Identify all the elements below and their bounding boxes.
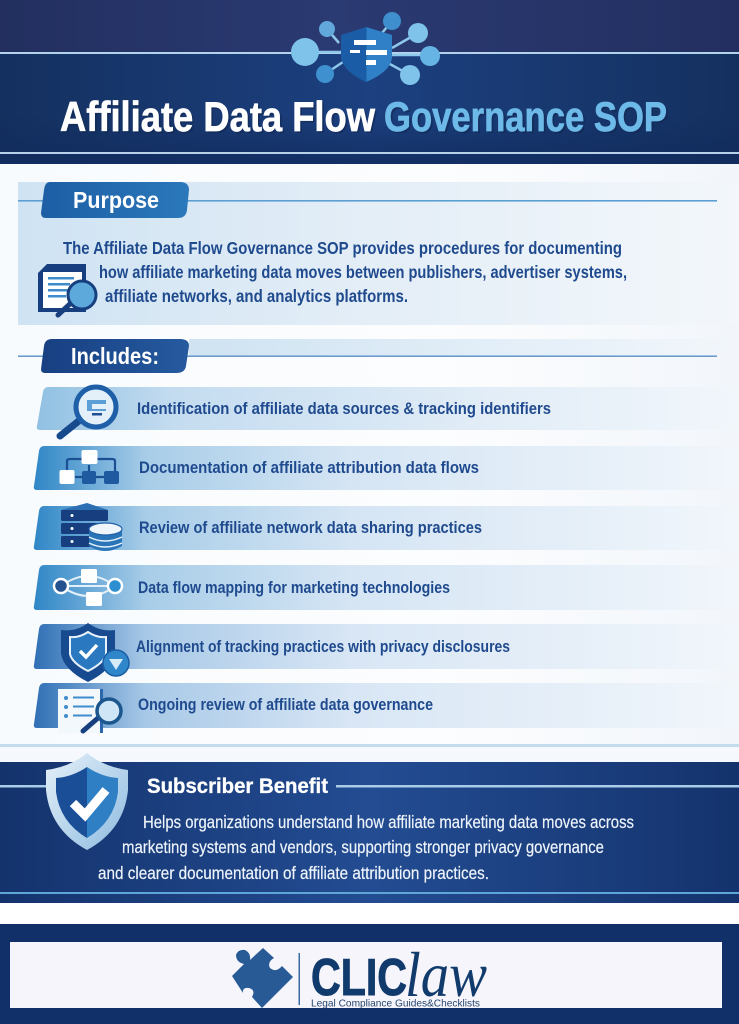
divider [0,744,739,747]
heading: includes: Includes: [71,343,159,369]
text: purpose description: how affiliate marketing data moves between publishers, advertiser systems, [99,262,627,282]
logo: wordmark [311,939,487,1010]
heading: subscriber benefit: Subscriber Benefit [147,775,328,798]
icon: checklist with magnifier [58,689,121,733]
row 4: flow mapping: Data flow mapping for marketing technologies [138,578,450,597]
heading: purpose [41,182,189,218]
row 1: data sources [37,387,739,436]
header banner [0,0,739,164]
row 3: network data sharing: Review of affiliate network data sharing practices [139,518,482,537]
title: Governance SOP [384,93,667,140]
title: Affiliate Data Flow [62,95,377,142]
icon: flow chart [60,450,119,484]
icon: shield with data nodes [291,12,440,85]
logo: tagline: Legal Compliance Guides&Checklists [311,998,480,1010]
row 2: attribution flows: Documentation of affiliate attribution data flows [139,458,479,477]
row 2: attribution flows [34,446,739,490]
text: benefit description: and clearer documentation of affiliate attribution practices. [98,863,489,883]
icon: server and database [61,503,122,551]
row 1: data sources: Identification of affiliate data sources & tracking identifiers [137,399,551,418]
text: benefit description: Helps organizations understand how affiliate marketing data moves across [143,812,634,832]
main content background [0,164,739,745]
logo: wordmark: CLIC [311,949,407,1007]
panel: subscriber benefit [0,753,739,903]
text: purpose description [63,238,627,306]
row 5: privacy alignment: Alignment of tracking practices with privacy disclosures [136,637,510,656]
logo: wordmark: law [405,939,487,1010]
text: purpose description: affiliate networks, and analytics platforms. [105,286,408,306]
heading: purpose: Purpose [73,187,159,213]
row 6: ongoing review: Ongoing review of affiliate data governance [138,695,433,714]
panel: includes [18,339,739,733]
heading: includes [41,339,189,373]
panel: footer [0,924,739,1024]
icon: document with magnifier [38,264,96,315]
title: Affiliate Data Flow [60,93,375,140]
icon: shield with check [46,753,128,850]
text: purpose description: The Affiliate Data Flow Governance SOP provides procedures for documenting [63,238,622,258]
row 6: ongoing review [34,683,739,733]
icon: connected nodes [54,569,122,606]
row 3: network data sharing [34,503,739,551]
text: benefit description [98,812,634,883]
panel: purpose [18,182,739,325]
title [60,93,669,142]
text: benefit description: marketing systems and vendors, supporting stronger privacy governance [122,837,604,857]
row 5: privacy alignment [34,623,739,682]
logo: divider [298,953,300,1005]
logo: puzzle piece [232,948,293,1008]
row 4: flow mapping [34,565,739,610]
icon: magnifier [60,387,116,436]
title: Governance SOP [386,95,669,142]
icon: privacy shield [61,623,129,682]
strip below main panel [0,747,739,762]
